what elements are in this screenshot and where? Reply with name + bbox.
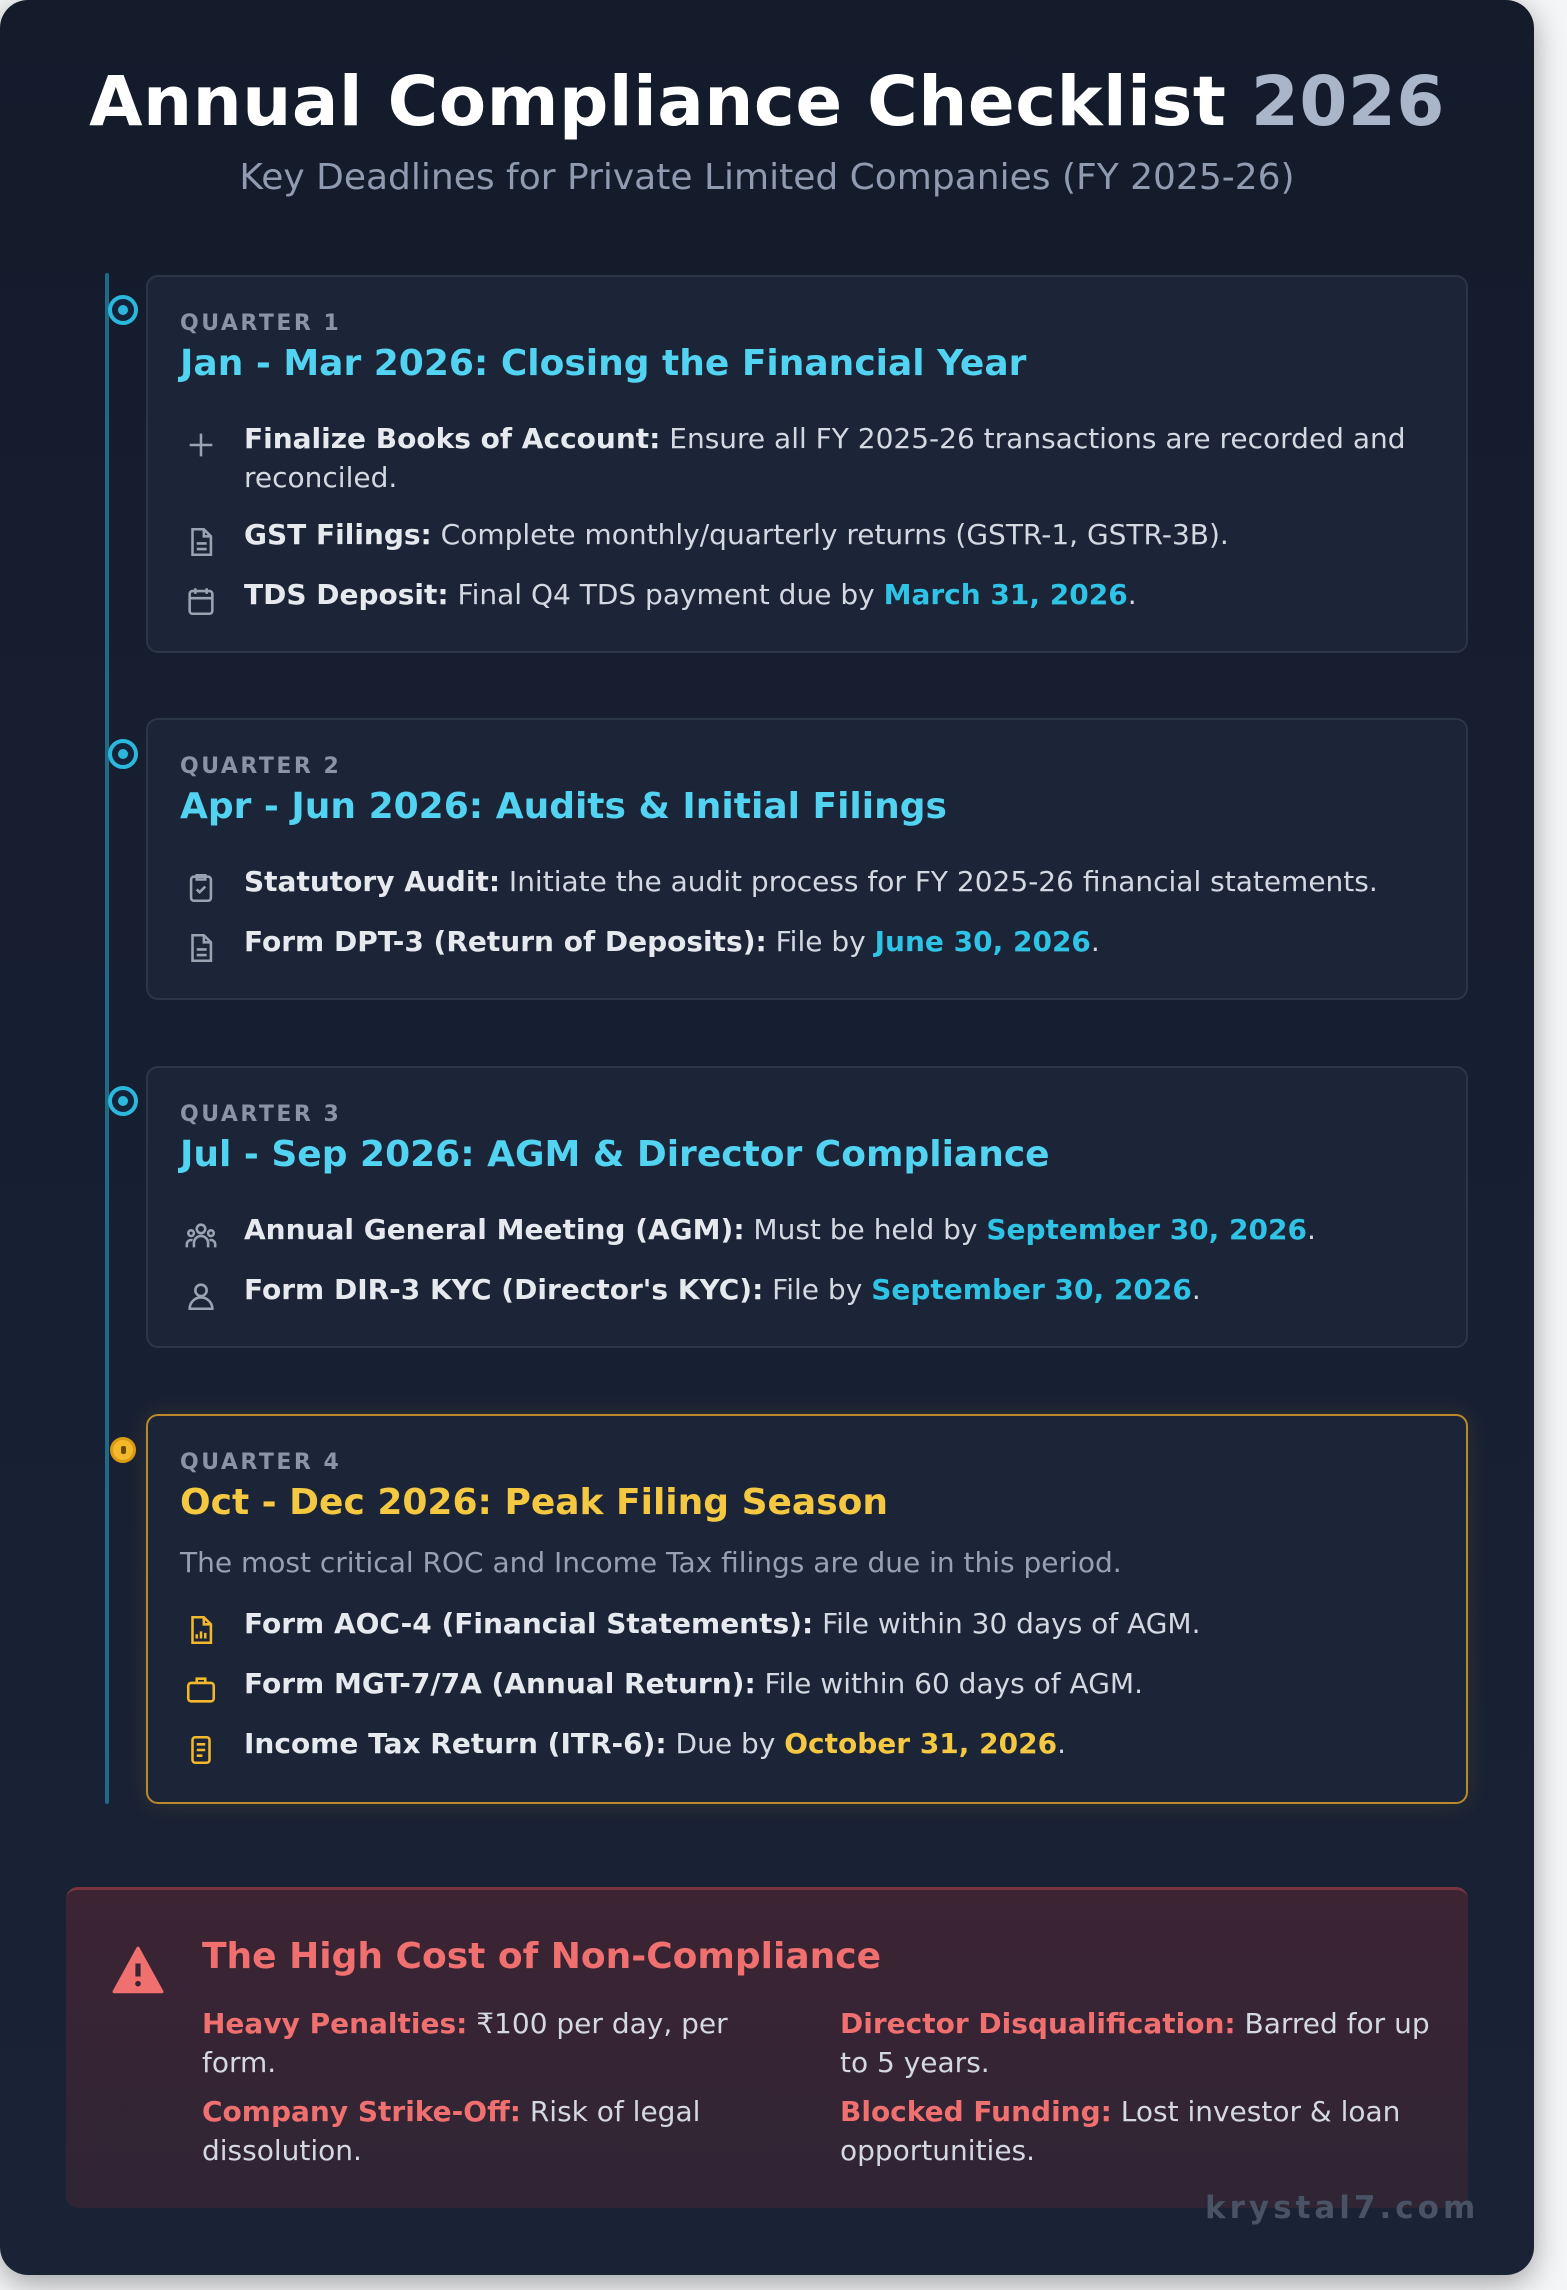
panel: quarter 1 — [146, 275, 1468, 653]
watermark: krystal7.com — [1205, 2190, 1479, 2226]
heading q4: Oct - Dec 2026: Peak Filing Season — [180, 1482, 888, 1523]
panel: quarter 2: QUARTER 2 — [180, 754, 341, 779]
panel: quarter 4 — [146, 1414, 1468, 1804]
heading: The High Cost of Non-Compliance — [202, 1936, 881, 1977]
item: GST Filings: Complete monthly/quarterly returns (GSTR-1, GSTR-3B). — [244, 518, 1229, 551]
point: Company Strike-Off: Risk of legal dissolution. — [202, 2095, 700, 2167]
title: Annual Compliance Checklist 2026 — [89, 62, 1445, 142]
icon doc — [191, 528, 212, 556]
heading q1: Jan - Mar 2026: Closing the Financial Year — [180, 343, 1026, 384]
item: Income Tax Return (ITR-6): Due by October 31, 2026. — [244, 1727, 1066, 1760]
icon receipt — [191, 1736, 211, 1764]
item: Form AOC-4 (Financial Statements): File within 30 days of AGM. — [244, 1607, 1200, 1640]
icon doc — [191, 934, 212, 962]
dot q1 — [108, 295, 138, 325]
panel: quarter 3 — [146, 1066, 1468, 1348]
subtitle: Key Deadlines for Private Limited Companies (FY 2025-26) — [239, 157, 1295, 198]
item: TDS Deposit: Final Q4 TDS payment due by March 31, 2026. — [244, 578, 1137, 611]
item: Annual General Meeting (AGM): Must be held by September 30, 2026. — [244, 1213, 1316, 1246]
icon clipboard — [190, 874, 212, 902]
panel: quarter 3: QUARTER 3 — [180, 1102, 341, 1127]
heading q2: Apr - Jun 2026: Audits & Initial Filings — [180, 786, 947, 827]
point: Director Disqualification: Barred for up to 5 years. — [840, 2007, 1430, 2079]
point: Blocked Funding: Lost investor & loan opportunities. — [840, 2095, 1400, 2167]
item: Form DIR-3 KYC (Director's KYC): File by September 30, 2026. — [244, 1273, 1201, 1306]
icon warning — [112, 1946, 164, 1994]
item: Form MGT-7/7A (Annual Return): File within 60 days of AGM. — [244, 1667, 1143, 1700]
dot q2 — [108, 739, 138, 769]
item: Form DPT-3 (Return of Deposits): File by June 30, 2026. — [244, 925, 1100, 958]
icon calendar — [188, 588, 214, 615]
icon report — [191, 1616, 212, 1644]
dot q4 — [110, 1437, 136, 1463]
description: The most critical ROC and Income Tax filings are due in this period. — [180, 1546, 1122, 1579]
icon plus — [190, 434, 212, 456]
icon briefcase — [186, 1677, 216, 1703]
panel: quarter 1: QUARTER 1 — [180, 311, 341, 336]
point: Heavy Penalties: ₹100 per day, per form. — [202, 2007, 728, 2079]
panel: quarter 4: QUARTER 4 — [180, 1450, 341, 1475]
heading q3: Jul - Sep 2026: AGM & Director Compliance — [180, 1134, 1050, 1175]
icon user — [188, 1283, 214, 1310]
icon group — [186, 1223, 216, 1248]
item: Statutory Audit: Initiate the audit process for FY 2025-26 financial statements. — [244, 865, 1378, 898]
item: Finalize Books of Account: Ensure all FY 2025-26 transactions are recorded and reconciled. — [244, 422, 1406, 494]
panel: non-compliance — [66, 1887, 1468, 2208]
timeline line — [105, 273, 109, 1804]
panel: quarter 2 — [146, 718, 1468, 1000]
dot q3 — [108, 1086, 138, 1116]
